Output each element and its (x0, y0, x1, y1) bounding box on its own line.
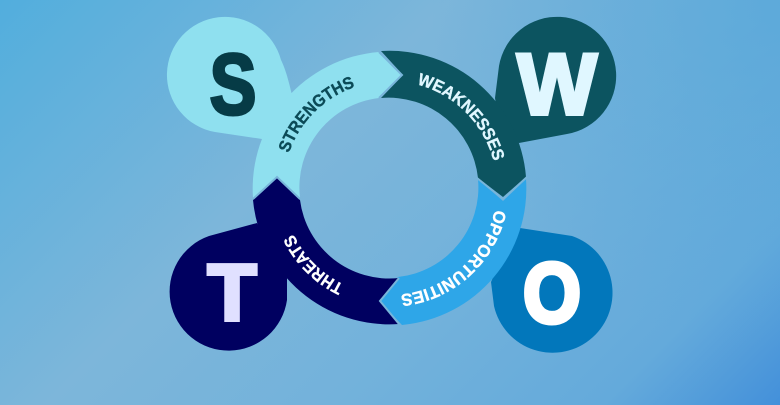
ring segment: threats: THREATS (284, 236, 341, 296)
ring segment: threats (253, 178, 398, 324)
S badge: S (209, 36, 257, 133)
ring segment: opportunities (381, 180, 526, 325)
ring segment: opportunities: OPPORTUNITIES (401, 211, 506, 306)
SWOT diagram (167, 16, 616, 353)
ring segment: strengths (252, 52, 400, 198)
T badge (170, 223, 287, 351)
O badge: O (523, 246, 581, 340)
O badge (491, 228, 613, 353)
ring segment: weaknesses: WEAKNESSES (419, 72, 504, 160)
ring segment: weaknesses (381, 50, 526, 197)
S badge (167, 17, 292, 139)
W badge (495, 17, 616, 143)
T badge: T (208, 248, 257, 337)
ring segment: strengths: STRENGTHS (279, 76, 354, 152)
W badge: W (517, 37, 597, 133)
